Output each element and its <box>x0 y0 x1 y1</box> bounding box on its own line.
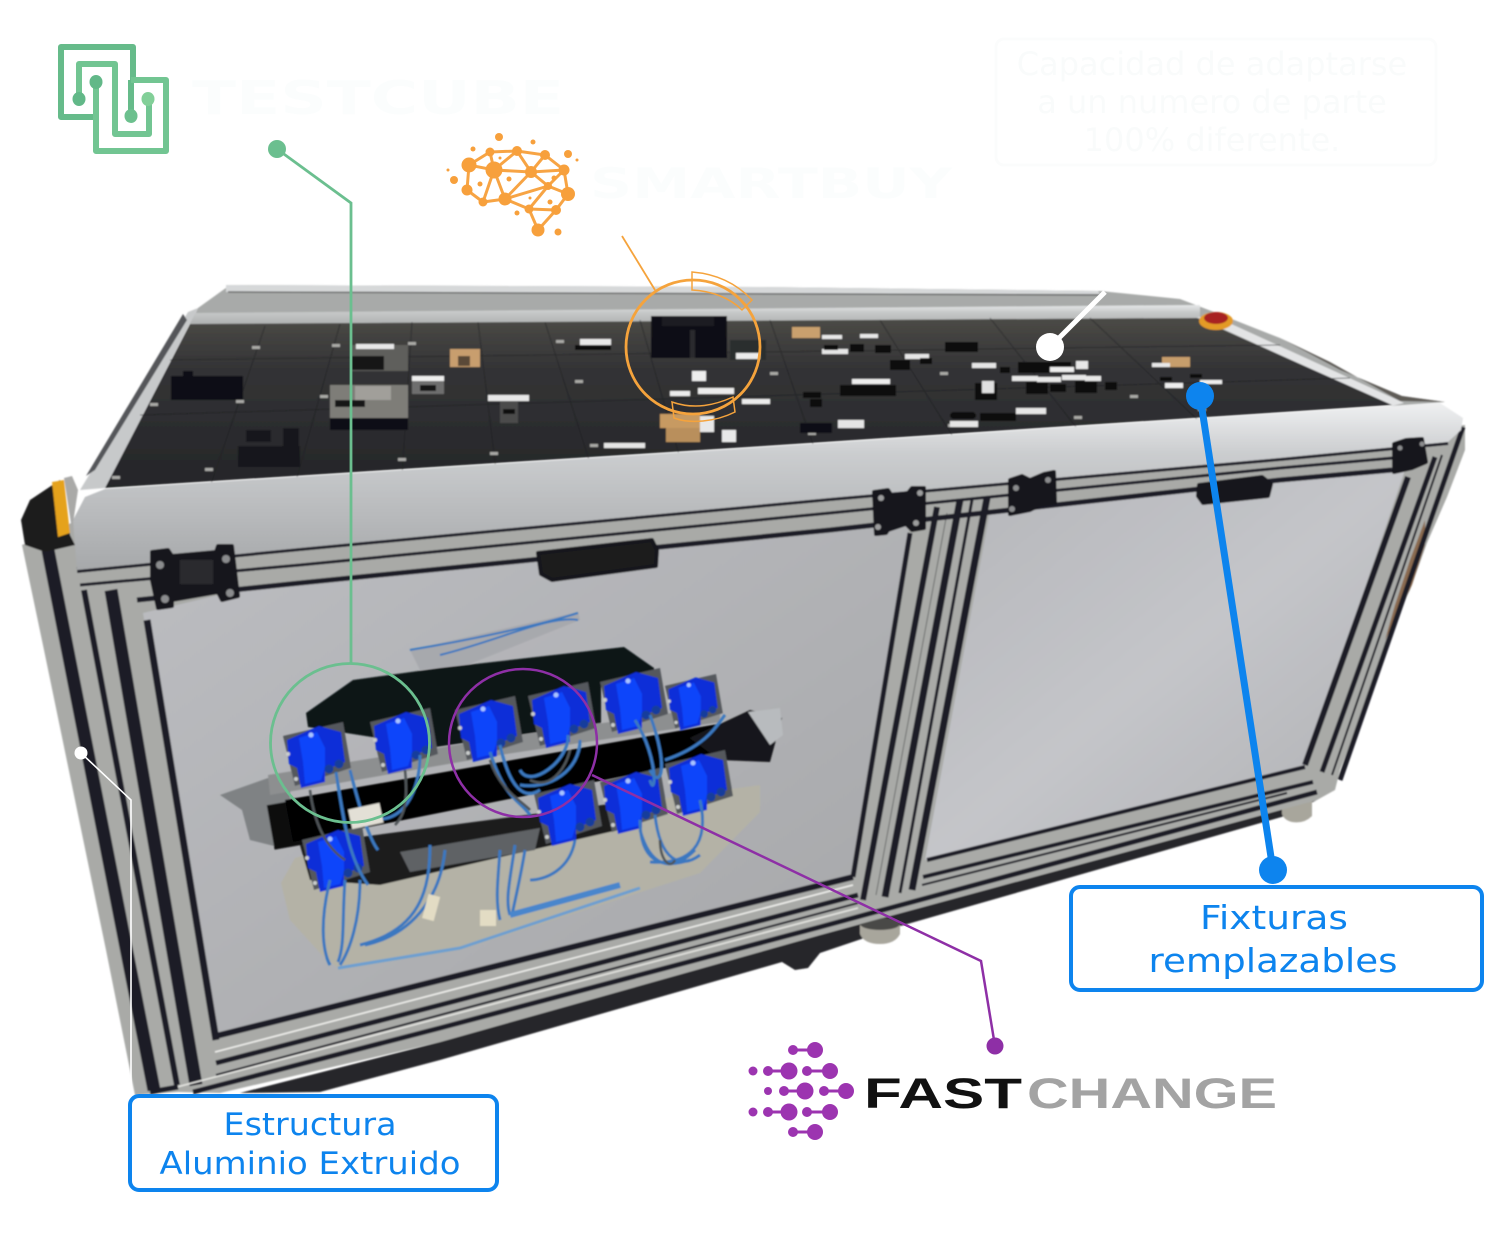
right edge rust fringe <box>1385 520 1425 640</box>
far right latch <box>1394 439 1426 472</box>
inset upper black blocks <box>306 647 654 747</box>
front middle latch <box>874 488 924 534</box>
callout: green marker to internal modules <box>268 140 430 822</box>
front left handle <box>538 540 657 580</box>
right door panel <box>925 470 1405 860</box>
callout: adaptation text box: 100% diferente. <box>1084 121 1340 159</box>
deck fasteners <box>112 340 1206 479</box>
label: Estructura Aluminio Extruido: Aluminio Extruido <box>160 1146 460 1182</box>
label: Fixturas remplazables <box>1071 887 1482 990</box>
right door latch <box>1009 472 1055 514</box>
blue modules <box>283 668 733 892</box>
centre post slots <box>853 498 987 900</box>
icon: orange network brain <box>446 133 578 236</box>
photo inset: pneumatic blue modules <box>220 612 783 968</box>
callout: adaptation text box: a un numero de parte <box>1037 83 1387 121</box>
underside shadow and feet <box>240 800 1317 1093</box>
left post slots <box>48 550 216 1090</box>
wordmark: SmartBuy: SMARTBUY <box>590 159 953 208</box>
callout: adaptation text box <box>996 39 1436 165</box>
front left latch <box>152 546 238 608</box>
emergency stop button <box>1199 312 1233 330</box>
corner cap and yellow reflector <box>21 476 78 552</box>
callout: adaptation text box: Capacidad de adaptarse <box>1017 45 1407 83</box>
logo: SmartBuy <box>446 133 953 236</box>
lid silver band <box>73 403 1463 570</box>
left door panel <box>143 522 910 1036</box>
label: Estructura Aluminio Extruido <box>130 1096 497 1190</box>
machine rear rail <box>80 285 1445 490</box>
logo: TestCube <box>61 47 564 151</box>
callout: white marker <box>1036 292 1105 361</box>
inset backing plate <box>281 785 760 968</box>
cabinet frame body <box>22 425 1465 1095</box>
inset lower modules <box>300 800 640 885</box>
inset ledge beam <box>268 706 720 795</box>
callout: orange marker to deck fixture <box>622 236 760 421</box>
inset lower black band <box>285 724 720 842</box>
deck tile seams <box>140 318 1350 487</box>
label: Fixturas remplazables: remplazables <box>1148 941 1398 980</box>
label: Fixturas remplazables: Fixturas <box>1200 898 1348 937</box>
top rail slots <box>77 442 1448 600</box>
machine top deck <box>105 318 1392 488</box>
blue pneumatic hoses <box>323 613 725 968</box>
callout: white marker to aluminium frame <box>74 746 131 1095</box>
logo: FastChange <box>748 1042 1277 1140</box>
icon: TestCube circuit <box>61 47 166 151</box>
machine: test bench cabinet <box>21 285 1465 1095</box>
right post slots <box>1305 427 1463 780</box>
inset left fragment <box>220 778 290 848</box>
latches and handles <box>152 439 1426 608</box>
callout: purple marker to fast change <box>449 669 1004 1054</box>
frame extrusion slots <box>48 427 1463 1092</box>
icon: purple dots <box>748 1042 854 1140</box>
dark hoses and tags <box>310 750 675 926</box>
label: Estructura Aluminio Extruido: Estructura <box>224 1107 396 1143</box>
callout: blue marker to replaceable fixtures <box>1186 382 1287 884</box>
right door handle <box>1198 477 1271 503</box>
wordmark: CHANGE: CHANGE <box>1027 1070 1277 1118</box>
wordmark: TestCube: TESTCUBE <box>192 71 564 125</box>
bottom rail slots <box>150 767 1317 1092</box>
wordmark: FAST: FAST <box>864 1070 1022 1118</box>
deck components <box>171 316 1222 467</box>
